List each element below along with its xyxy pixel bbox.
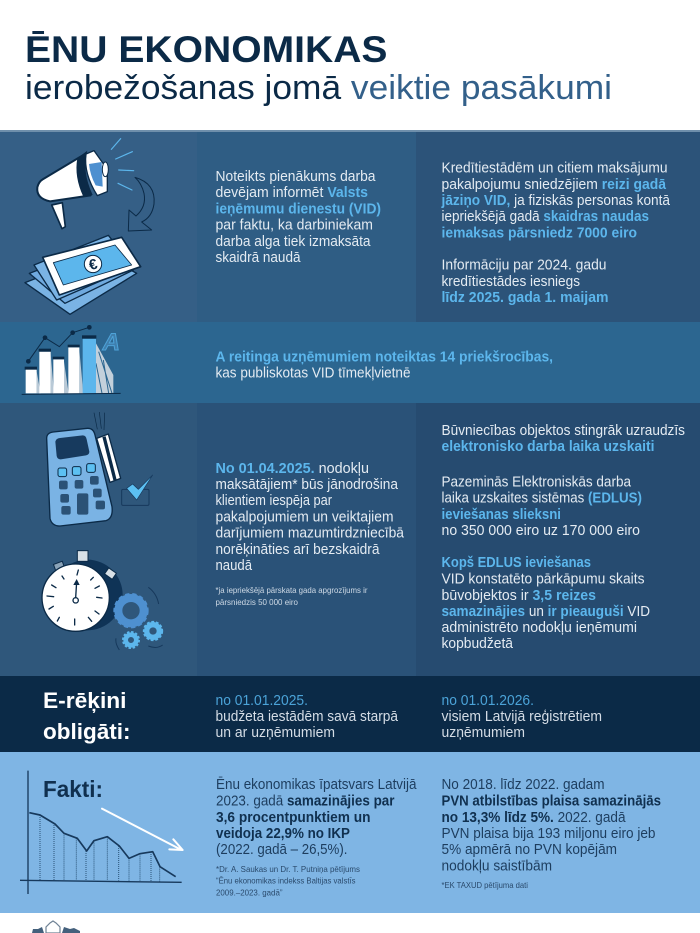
panel: employer duty: darba alga tiek izmaksāta bbox=[216, 234, 371, 250]
panel: construction time tracking: Kopš EDLUS ieviešanas bbox=[442, 555, 591, 571]
text: from 2025 bbox=[216, 693, 399, 741]
text: VAT gap bbox=[442, 777, 661, 890]
panel: cashless payment duty: *ja iepriekšējā pārskata gada apgrozījums ir bbox=[216, 585, 368, 595]
panel: credit institutions: iepriekšējā gadā skaidras naudas bbox=[442, 209, 649, 225]
text: shadow economy share: 2023. gadā samazinājies par bbox=[216, 794, 395, 810]
panel: facts bbox=[0, 752, 700, 913]
panel: e-invoices bbox=[0, 676, 700, 752]
panel: A rating bbox=[0, 322, 700, 403]
panel: credit institutions: jāziņo VID, ja fiziskās personas kontā bbox=[441, 193, 671, 209]
panel: credit institutions: pakalpojumu sniedzējiem reizi gadā bbox=[442, 177, 667, 193]
panel: construction time tracking: no 350 000 eiro uz 170 000 eiro bbox=[442, 523, 640, 539]
title: ierobežošanas jomā veiktie pasākumi bbox=[25, 69, 612, 107]
panel: construction time tracking: Pazeminās Elektroniskās darba bbox=[442, 474, 632, 490]
panel: cashless payment duty: darījumiem mazumtirdzniecībā bbox=[216, 526, 405, 542]
panel: A rating: A reitinga uzņēmumiem noteiktas 14 priekšrocības, bbox=[216, 350, 553, 366]
panel: construction time tracking: administrēto nodokļu ieņēmumi bbox=[442, 620, 637, 636]
panel: construction time tracking bbox=[416, 403, 700, 676]
text: VAT gap: No 2018. līdz 2022. gadam bbox=[442, 777, 604, 793]
text: VAT gap: PVN plaisa bija 193 miljonu eiro jeb bbox=[442, 826, 656, 842]
panel: credit institutions bbox=[416, 130, 700, 322]
panel: cashless payment duty bbox=[197, 403, 416, 676]
heading: e-invoices: obligāti: bbox=[43, 719, 130, 744]
panel: cashless payment duty: norēķināties arī bezskaidrā bbox=[216, 542, 380, 558]
title bbox=[25, 29, 612, 107]
panel: construction time tracking: samazinājies un ir pieauguši VID bbox=[442, 604, 650, 620]
text: shadow economy share: 2009.–2023. gadā” bbox=[216, 888, 283, 898]
panel: construction time tracking: laika uzskaites sistēmas (EDLUS) bbox=[442, 490, 642, 506]
text: VAT gap: nodokļu saistībām bbox=[442, 858, 552, 874]
title: ĒNU EKONOMIKAS bbox=[25, 29, 388, 70]
heading: e-invoices: E-rēķini bbox=[43, 688, 126, 713]
icon: stopwatch and gears bbox=[42, 551, 163, 650]
text: shadow economy share bbox=[216, 777, 417, 898]
text: from 2025: no 01.01.2025. bbox=[216, 693, 308, 709]
panel: credit institutions: Informāciju par 2024. gadu bbox=[442, 258, 606, 274]
panel: cashless payment duty: pakalpojumiem un veiktajiem bbox=[216, 510, 394, 526]
panel: employer duty: devējam informēt Valsts bbox=[216, 185, 368, 201]
icon: rating bar chart: A bbox=[102, 329, 120, 356]
icon: megaphone and banknotes bbox=[25, 139, 154, 314]
panel: icons for cashless payment bbox=[0, 403, 197, 676]
text: from 2026: visiem Latvijā reģistrētiem bbox=[442, 709, 602, 725]
heading: e-invoices bbox=[43, 688, 130, 744]
panel: credit institutions: kredītiestādes iesniegs bbox=[442, 274, 580, 290]
panel: employer duty: par faktu, ka darbiniekam bbox=[216, 218, 373, 234]
panel: construction time tracking: elektronisko darba laika uzskaiti bbox=[442, 439, 654, 455]
text: VAT gap: 5% apmērā no PVN kopējām bbox=[442, 842, 617, 858]
icon: payment terminal bbox=[47, 412, 153, 526]
text: shadow economy share: *Dr. A. Saukas un Dr. T. Putniņa pētījums bbox=[216, 864, 360, 874]
panel: icons for cash salary bbox=[0, 130, 197, 322]
text: shadow economy share: “Ēnu ekonomikas indekss Baltijas valstīs bbox=[216, 876, 356, 886]
text: from 2026: uzņēmumiem bbox=[442, 725, 525, 741]
panel: employer duty: skaidrā naudā bbox=[216, 250, 301, 266]
panel: cashless payment duty: pārsniedzis 50 000 eiro bbox=[216, 597, 298, 607]
panel: credit institutions: Kredītiestādēm un citiem maksājumu bbox=[442, 160, 668, 176]
panel: construction time tracking: kopbudžetā bbox=[442, 636, 514, 652]
panel: A rating: kas publiskotas VID tīmekļvietnē bbox=[216, 366, 410, 382]
panel: cashless payment duty: No 01.04.2025. nodokļu bbox=[216, 461, 369, 477]
text: VAT gap: *EK TAXUD pētījuma dati bbox=[442, 880, 528, 890]
text: VAT gap: PVN atbilstības plaisa samazinājās bbox=[442, 794, 661, 810]
panel: construction time tracking: ieviešanas slieksni bbox=[442, 507, 561, 523]
text: from 2026: no 01.01.2026. bbox=[442, 693, 534, 709]
chart: declining line bbox=[20, 771, 183, 894]
text: shadow economy share: 3,6 procentpunktiem un bbox=[216, 810, 370, 826]
panel: cashless payment duty: naudā bbox=[216, 558, 253, 574]
panel: construction time tracking: Būvniecības objektos stingrāk uzraudzīs bbox=[442, 423, 685, 439]
panel: construction time tracking: būvobjektos ir 3,5 reizes bbox=[442, 588, 596, 604]
text: from 2025: budžeta iestādēm savā starpā bbox=[216, 709, 399, 725]
text: from 2026 bbox=[442, 693, 602, 741]
panel: cashless payment duty: klientiem iespēja par bbox=[216, 493, 332, 509]
panel: credit institutions: iemaksas pārsniedz 7000 eiro bbox=[442, 226, 637, 242]
icon: megaphone and banknotes: € bbox=[87, 257, 99, 274]
panel: employer duty bbox=[197, 130, 416, 322]
text: shadow economy share: (2022. gadā – 26,5%). bbox=[216, 842, 348, 858]
panel: employer duty: ieņēmumu dienestu (VID) bbox=[216, 202, 381, 218]
text: from 2025: un ar uzņēmumiem bbox=[216, 725, 335, 741]
text: shadow economy share: Ēnu ekonomikas īpatsvars Latvijā bbox=[216, 777, 417, 793]
logo: coat of arms bbox=[32, 921, 80, 933]
panel: credit institutions: līdz 2025. gada 1. maijam bbox=[442, 290, 608, 306]
text: shadow economy share: veidoja 22,9% no IKP bbox=[216, 826, 350, 842]
heading: facts: Fakti: bbox=[43, 776, 103, 802]
panel: cashless payment duty: maksātājiem* būs jānodrošina bbox=[216, 477, 399, 493]
icon: rating bar chart bbox=[22, 325, 121, 394]
text: VAT gap: no 13,3% līdz 5%. 2022. gadā bbox=[442, 810, 626, 826]
panel: employer duty: Noteikts pienākums darba bbox=[216, 169, 376, 185]
panel: construction time tracking: VID konstatēto pārkāpumu skaits bbox=[442, 572, 644, 588]
